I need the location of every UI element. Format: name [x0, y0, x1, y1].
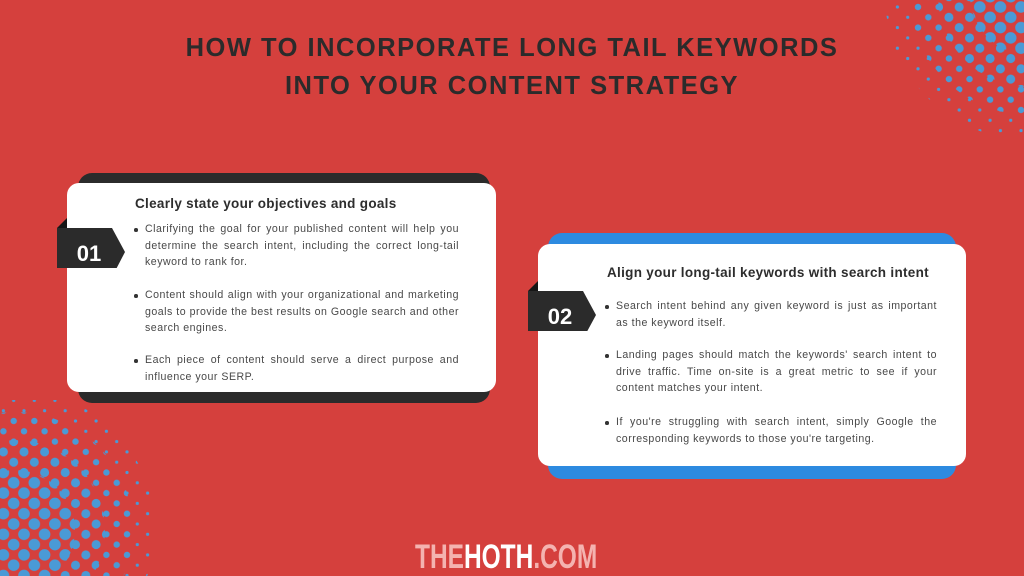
- heading: step 01: Clearly state your objectives and goals: [135, 196, 397, 211]
- title: HOW TO INCORPORATE LONG TAIL KEYWORDS: [186, 34, 838, 62]
- panel: step 02: Landing pages should match the keywords' search intent to drive traffic. Time on-site is a great metric to see if your content matches your intent.: [616, 349, 937, 394]
- panel: step 01: Each piece of content should serve a direct purpose and influence your SERP.: [145, 354, 459, 383]
- badge 02: [528, 281, 596, 331]
- heading: step 02: Align your long-tail keywords with search intent: [607, 265, 929, 280]
- footer logo: THEHOTH.COM: [415, 538, 597, 576]
- panel: step 02: [528, 233, 966, 479]
- badge 01: [57, 218, 125, 268]
- panel: step 02: If you're struggling with search intent, simply Google the corresponding keywords to those you're targeting.: [616, 416, 937, 445]
- panel: step 01: Content should align with your organizational and marketing goals to provide the best results on Google search and other search engines.: [145, 289, 459, 334]
- panel: step 01: [57, 173, 496, 403]
- badge 01: 01: [77, 241, 101, 266]
- title: [186, 34, 838, 100]
- bullets step 02: Search intent behind any given keyword is just as important as the keyword itself.: [616, 300, 937, 329]
- badge 02: 02: [548, 304, 572, 329]
- bullets step 01: Clarifying the goal for your published content will help you determine the search intent, including the correct long-tail keyword to rank for.: [145, 223, 459, 268]
- title: INTO YOUR CONTENT STRATEGY: [285, 72, 739, 100]
